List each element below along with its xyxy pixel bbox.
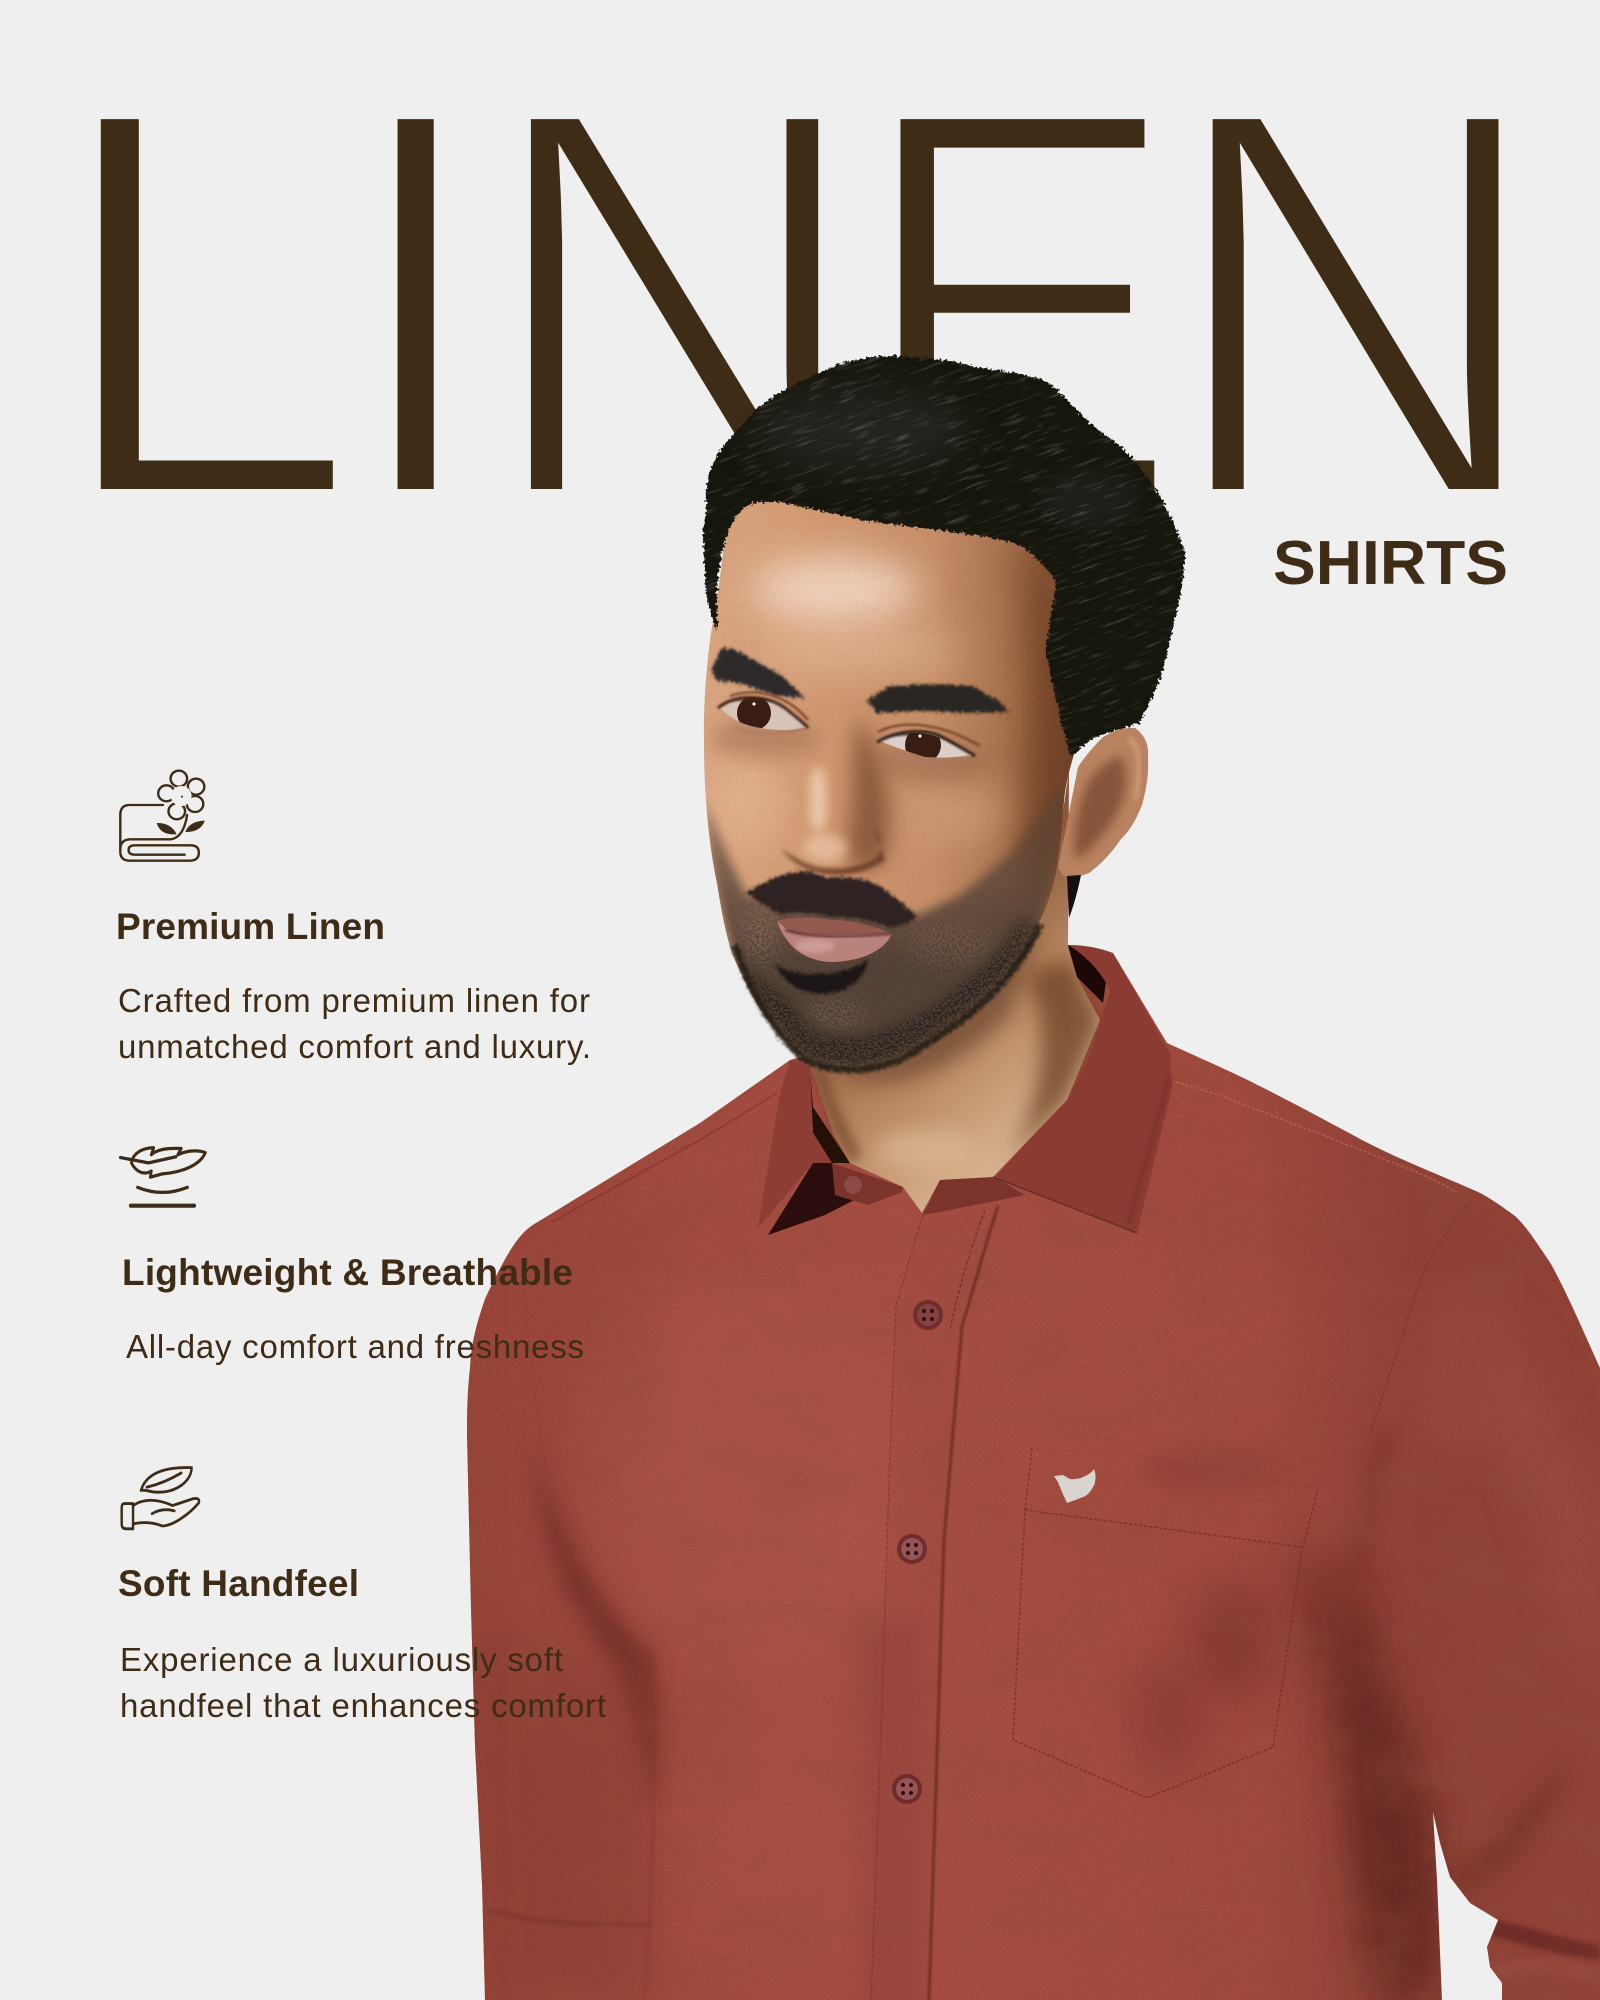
pocket — [1013, 1448, 1318, 1798]
armpit gap — [1433, 1812, 1502, 2000]
button 2 — [897, 1534, 927, 1564]
hair — [702, 354, 1186, 759]
title: LINEN: I — [342, 0, 489, 615]
icon: towel with flower — [120, 771, 204, 861]
description: Experience a luxuriously soft — [120, 1641, 563, 1678]
eyebrow right — [867, 684, 1009, 713]
description: unmatched comfort and luxury. — [118, 1028, 591, 1065]
description: handfeel that enhances comfort — [120, 1687, 606, 1724]
description: All-day comfort and freshness — [126, 1328, 584, 1365]
heading: Premium Linen — [116, 906, 385, 947]
collar: right leaf — [995, 945, 1172, 1233]
lips — [777, 918, 892, 962]
photo: model in rust linen shirt — [466, 354, 1600, 2000]
feature: premium linen — [116, 771, 591, 1065]
heading: Soft Handfeel — [118, 1563, 359, 1604]
description — [120, 1641, 606, 1724]
shoulder seams — [1176, 1082, 1456, 1192]
title: LINEN: E — [854, 0, 1182, 615]
under-collar shadow — [768, 1163, 860, 1235]
title: LINEN — [48, 0, 1549, 615]
eye left — [715, 692, 810, 734]
icon: feather above surface — [120, 1148, 205, 1206]
moustache — [746, 871, 917, 927]
feature: lightweight and breathable — [120, 1148, 584, 1365]
heading: Lightweight & Breathable — [122, 1252, 573, 1293]
title: LINEN: L — [48, 0, 358, 615]
face — [704, 500, 1074, 1068]
hair below ear — [1067, 875, 1081, 918]
soul patch — [775, 960, 868, 994]
sleeve seams — [1369, 1206, 1467, 1437]
ear — [1058, 728, 1148, 877]
neck — [800, 770, 1100, 1213]
title: LINEN: N — [1162, 0, 1549, 614]
collar band — [832, 1075, 1170, 1233]
eye right — [875, 725, 980, 763]
title: LINEN: N — [480, 0, 869, 615]
inner collar shadow — [810, 945, 1110, 1163]
feature: soft handfeel — [118, 1468, 606, 1724]
beard — [706, 787, 1066, 1076]
placket — [871, 1206, 998, 2000]
icon: hand with leaf — [122, 1468, 199, 1529]
collar: left leaf — [758, 1060, 832, 1228]
subtitle: SHIRTS: SHIRTS — [1273, 529, 1508, 598]
eyebrow left — [712, 648, 805, 698]
button 3 — [892, 1774, 922, 1804]
logo: embroidered bird — [1054, 1469, 1096, 1503]
button 1 — [913, 1300, 943, 1330]
shirt body — [460, 920, 1600, 2000]
description: Crafted from premium linen for — [118, 982, 590, 1019]
description — [118, 982, 591, 1065]
